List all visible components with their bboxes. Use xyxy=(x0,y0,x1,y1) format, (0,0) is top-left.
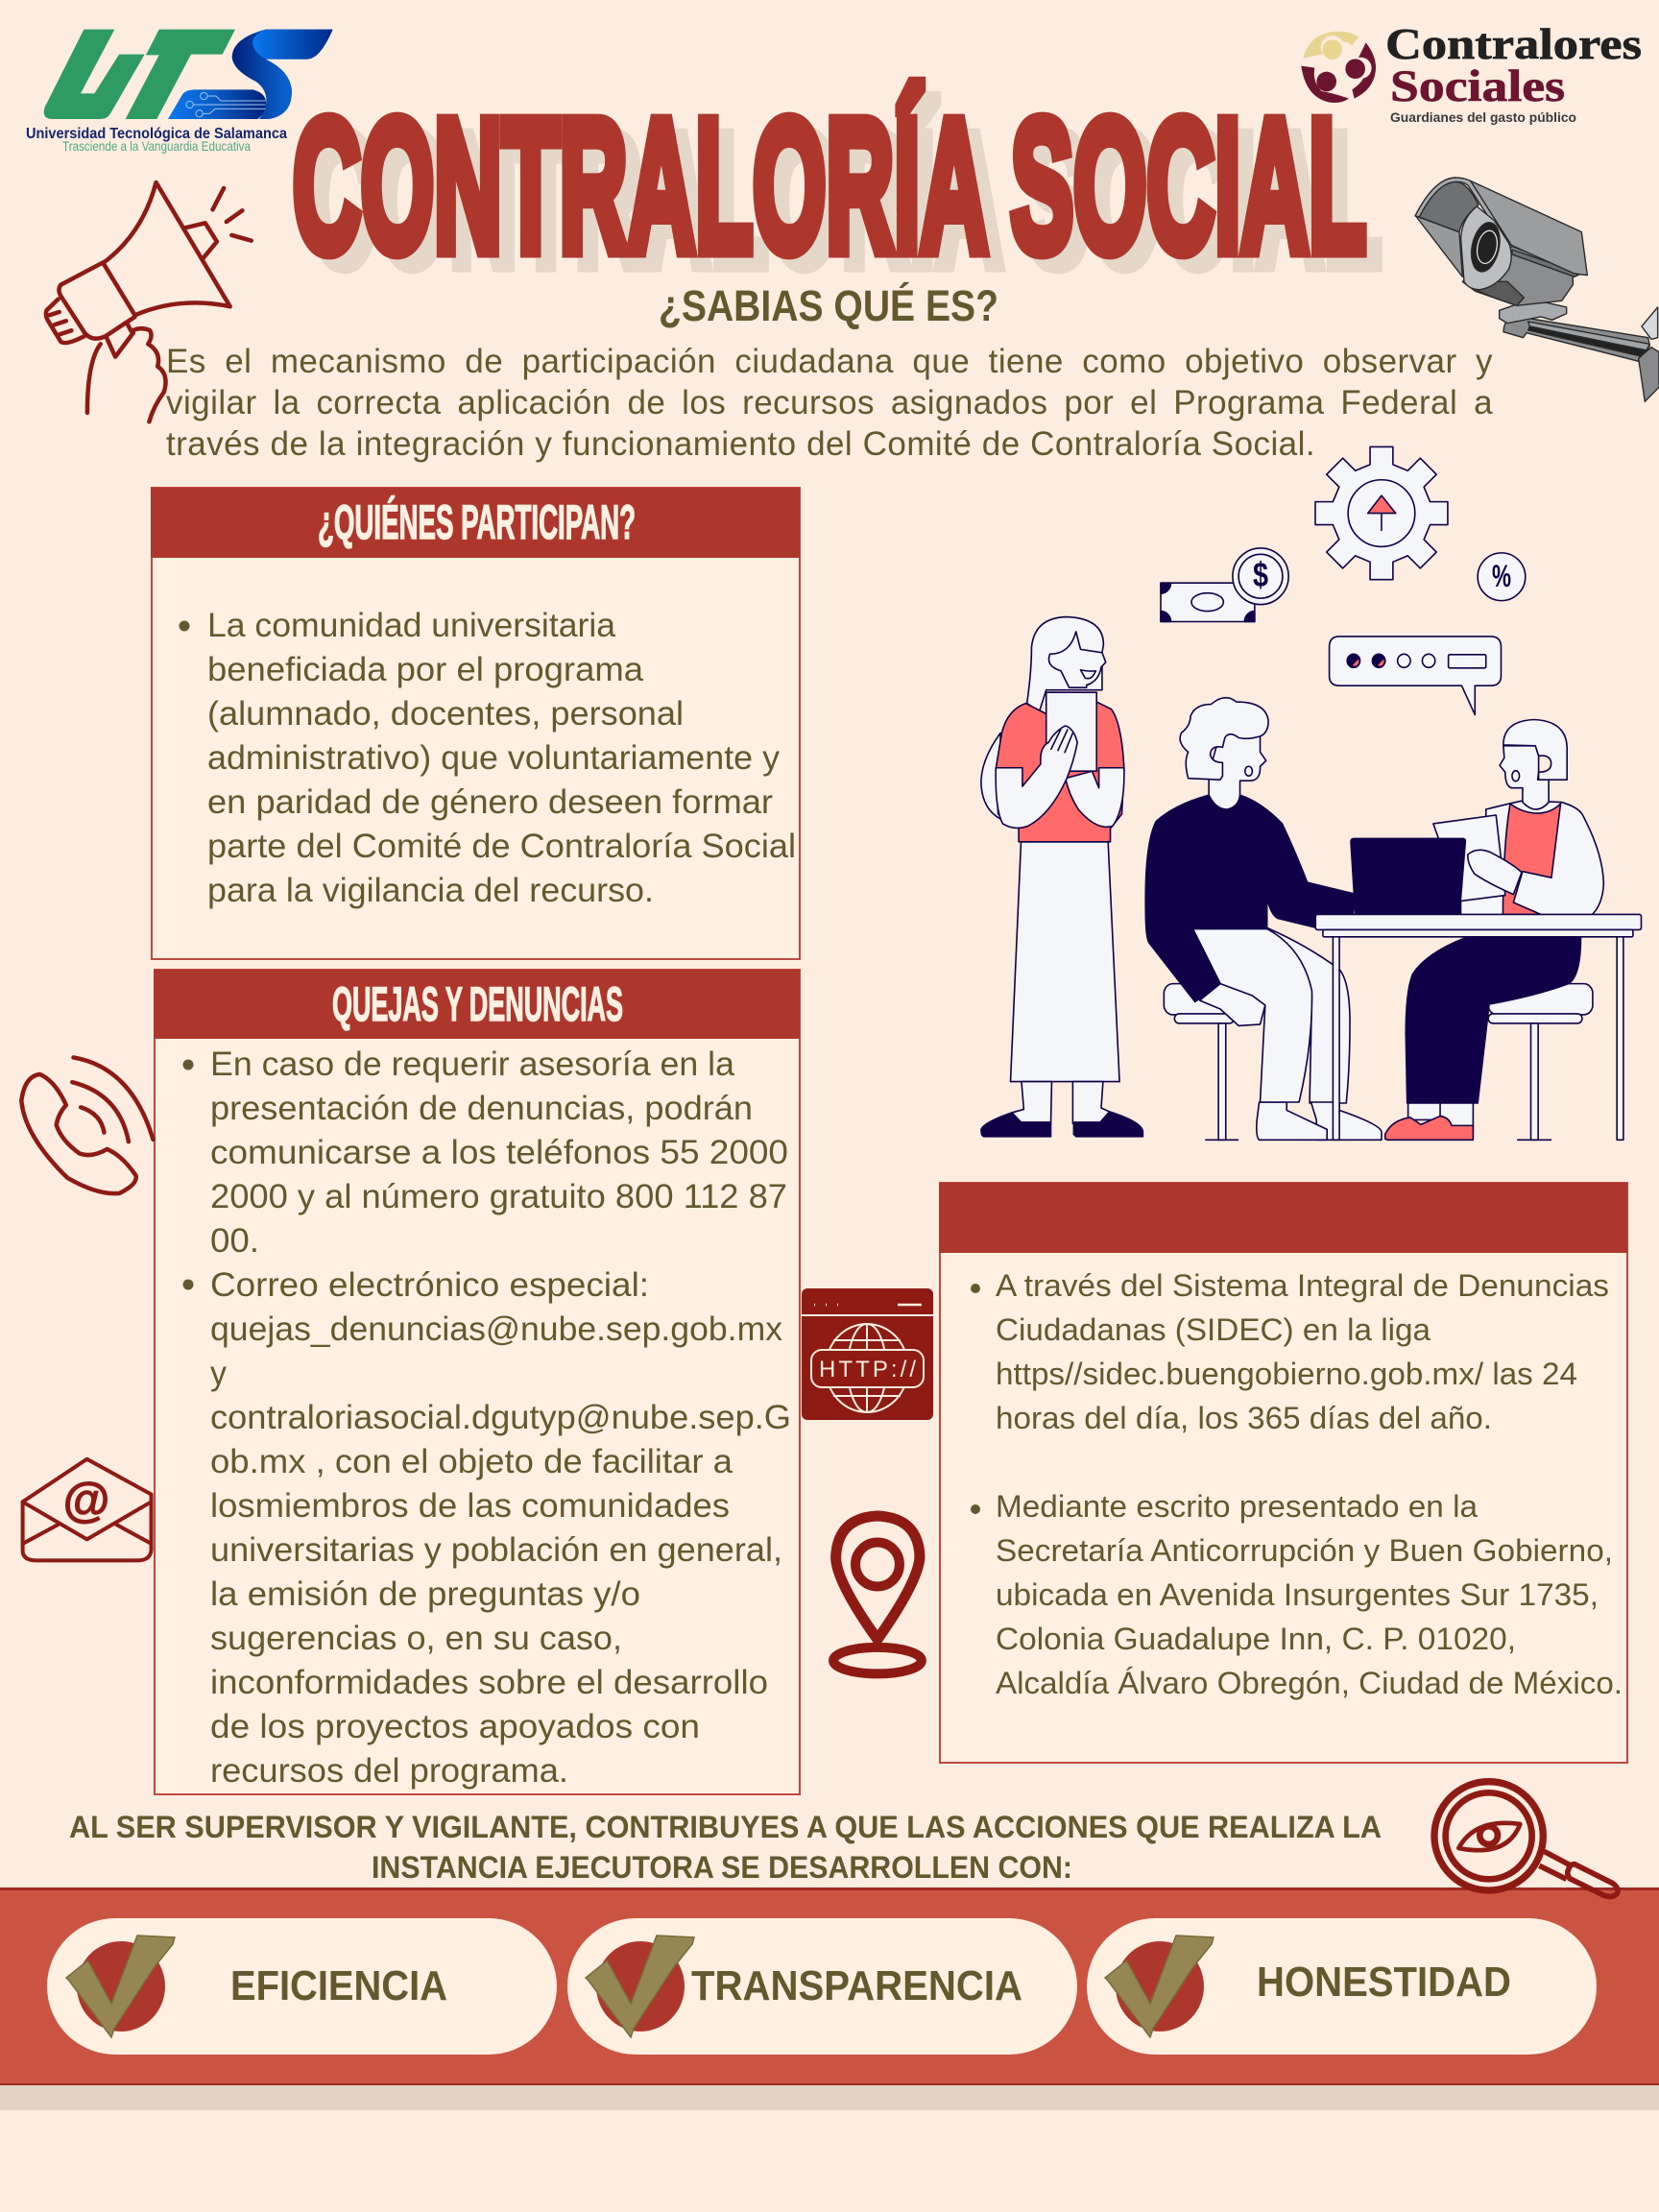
bullet text: contraloriasocial.dgutyp@nube.sep.G xyxy=(210,1399,791,1436)
speech bubble xyxy=(1330,637,1501,715)
figure: standing woman xyxy=(981,617,1142,1137)
panel: quienes participan xyxy=(151,488,800,959)
table xyxy=(1315,914,1641,1140)
bullet text: La comunidad universitaria xyxy=(207,607,616,644)
logo: Contralores Sociales: Sociales xyxy=(1390,61,1565,111)
bullet text: Correo electrónico especial: xyxy=(210,1266,649,1304)
icon: web browser: HTTP:// xyxy=(819,1357,916,1382)
bullet text: ob.mx , con el objeto de facilitar a xyxy=(210,1443,733,1480)
figure: seated person at table xyxy=(1351,719,1603,1140)
bullet text: en paridad de género deseen formar xyxy=(207,783,773,821)
value: eficiencia xyxy=(47,1918,557,2055)
closing statement: INSTANCIA EJECUTORA SE DESARROLLEN CON: xyxy=(372,1850,1072,1885)
logo: Contralores Sociales: Guardianes del gasto público xyxy=(1390,109,1576,125)
value: transparencia xyxy=(567,1918,1077,2055)
logo: Universidad Tecnológica de Salamanca: Universidad Tecnológica de Salamanca xyxy=(26,126,287,142)
intro paragraph: través de la integración y funcionamiento del Comité de Contraloría Social. xyxy=(166,425,1315,463)
panel: values band xyxy=(0,1887,1659,2085)
icon: location pin xyxy=(833,1516,922,1673)
bullet text: Alcaldía Álvaro Obregón, Ciudad de México. xyxy=(996,1666,1623,1700)
heading bar xyxy=(939,1183,1627,1253)
icon: email envelope: @ xyxy=(63,1473,109,1527)
value: eficiencia: EFICIENCIA xyxy=(230,1962,447,2009)
coin dollar sign: $ xyxy=(1253,555,1268,594)
value: honestidad xyxy=(1087,1918,1597,2055)
bullet text: horas del día, los 365 días del año. xyxy=(996,1401,1492,1435)
value: transparencia: TRANSPARENCIA xyxy=(691,1962,1022,2009)
intro paragraph: Es el mecanismo de participación ciudadana que tiene como objetivo observar y xyxy=(166,343,1493,380)
bullet text: inconformidades sobre el desarrollo xyxy=(210,1664,768,1701)
bullet text: 00. xyxy=(210,1222,259,1260)
value: honestidad: HONESTIDAD xyxy=(1257,1959,1511,2006)
icon: banknote and coin xyxy=(1161,548,1288,622)
illustration: people at a table xyxy=(981,446,1641,1140)
heading bar xyxy=(154,970,800,1039)
icon: megaphone xyxy=(46,182,252,421)
heading: sabias que es: ¿SABIAS QUÉ ES? xyxy=(659,281,998,330)
bullet text: para la vigilancia del recurso. xyxy=(207,872,654,909)
panel: sistema de denuncias xyxy=(939,1183,1627,1763)
bullet text: universitarias y población en general, xyxy=(210,1531,782,1569)
logo: Universidad Tecnológica de Salamanca xyxy=(26,30,333,154)
logo: Contralores Sociales xyxy=(1301,20,1642,125)
bullet text: Ciudadanas (SIDEC) en la liga xyxy=(996,1312,1431,1347)
bullet text xyxy=(179,607,796,909)
bullet text: de los proyectos apoyados con xyxy=(210,1708,700,1745)
bullet text: recursos del programa. xyxy=(210,1752,568,1790)
heading bar xyxy=(151,488,800,558)
bullet text xyxy=(971,1268,1623,1700)
bullet text: A través del Sistema Integral de Denuncias xyxy=(996,1268,1609,1303)
icon: security camera xyxy=(1415,178,1659,401)
bullet text: quejas_denuncias@nube.sep.gob.mx xyxy=(210,1310,783,1348)
bullet text: beneficiada por el programa xyxy=(207,651,644,688)
figure: seated person in dark sweater xyxy=(1145,698,1382,1140)
bullet text: ubicada en Avenida Insurgentes Sur 1735, xyxy=(996,1577,1599,1612)
bullet text xyxy=(182,1046,791,1790)
logo: Contralores Sociales: Contralores xyxy=(1385,20,1642,68)
bullet text: losmiembros de las comunidades xyxy=(210,1487,730,1525)
bullet text: comunicarse a los teléfonos 55 2000 xyxy=(210,1134,788,1171)
closing statement: AL SER SUPERVISOR Y VIGILANTE, CONTRIBUYES A QUE LAS ACCIONES QUE REALIZA LA xyxy=(69,1810,1382,1844)
bullet text: Mediante escrito presentado en la xyxy=(996,1489,1478,1524)
icon: percent xyxy=(1478,553,1526,601)
bullet text: sugerencias o, en su caso, xyxy=(210,1620,622,1657)
bullet text: y xyxy=(210,1355,227,1392)
percent sign: % xyxy=(1492,559,1511,593)
bullet text: En caso de requerir asesoría en la xyxy=(210,1046,735,1083)
icon: email envelope xyxy=(23,1459,152,1560)
icon: web browser xyxy=(802,1288,933,1420)
heading text: ¿QUIÉNES PARTICIPAN? xyxy=(318,495,636,549)
logo: Universidad Tecnológica de Salamanca: Trasciende a la Vanguardia Educativa xyxy=(62,138,251,154)
band shadow xyxy=(0,2085,1659,2110)
icon: magnifier with eye xyxy=(1434,1782,1618,1897)
heading text: QUEJAS Y DENUNCIAS xyxy=(332,977,623,1031)
intro paragraph: vigilar la correcta aplicación de los recursos asignados por el Programa Federal a xyxy=(166,384,1493,421)
panel: quejas y denuncias xyxy=(154,970,800,1794)
bullet text: 2000 y al número gratuito 800 112 87 xyxy=(210,1178,787,1215)
bullet text: https//sidec.buengobierno.gob.mx/ las 24 xyxy=(996,1357,1577,1391)
bullet text: presentación de denuncias, podrán xyxy=(210,1090,753,1127)
bullet text: administrativo) que voluntariamente y xyxy=(207,739,781,777)
intro paragraph xyxy=(166,343,1493,463)
icon: gear xyxy=(1315,446,1448,580)
bullet text: Colonia Guadalupe Inn, C. P. 01020, xyxy=(996,1622,1516,1656)
bullet text: la emisión de preguntas y/o xyxy=(210,1575,640,1613)
bullet text: (alumnado, docentes, personal xyxy=(207,695,684,733)
icon: telephone xyxy=(21,1057,153,1193)
bullet text: parte del Comité de Contraloría Social xyxy=(207,828,796,865)
bullet text: Secretaría Anticorrupción y Buen Gobierno, xyxy=(996,1533,1613,1568)
closing statement xyxy=(69,1810,1382,1885)
